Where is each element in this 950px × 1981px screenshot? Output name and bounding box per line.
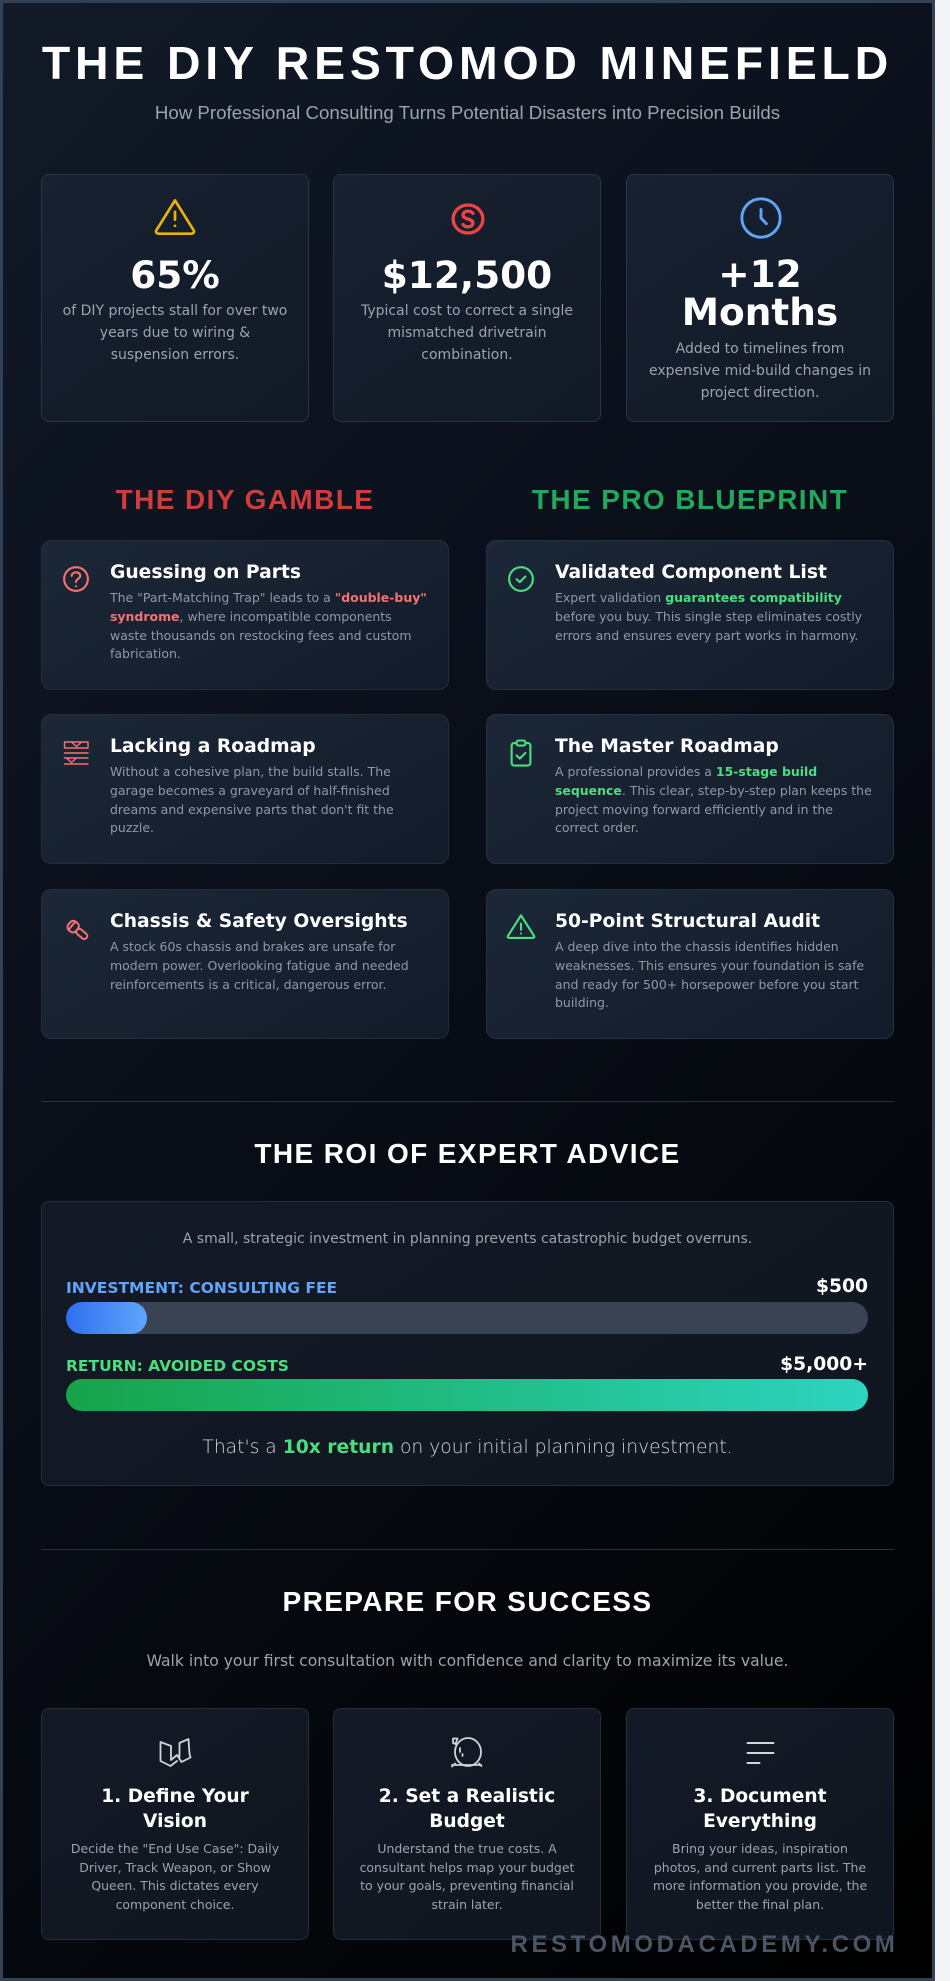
stat description: Added to timelines from [676, 341, 844, 357]
stat number: $12,500 [382, 253, 552, 297]
return label: RETURN: AVOIDED COSTS [66, 1357, 289, 1375]
stat description [360, 303, 573, 363]
feature text: weaknesses. This ensures your foundation is safe [555, 958, 864, 973]
feature text: garage becomes a graveyard of half-finished [110, 783, 390, 798]
feature text: sequence. This clear, step-by-step plan keeps the [555, 783, 872, 798]
step title: 3. Document [693, 1786, 827, 1807]
panel: guessing on parts [41, 540, 449, 690]
stat number: Months [682, 290, 838, 334]
step text: Understand the true costs. A [377, 1841, 557, 1856]
panel: lacking a roadmap [41, 714, 449, 864]
feature text: correct order. [555, 820, 639, 835]
step text: consultant helps map your budget [360, 1860, 574, 1875]
icon: bolt [66, 920, 88, 940]
stat number [682, 252, 838, 334]
feature text: A stock 60s chassis and brakes are unsafe for [110, 939, 395, 954]
step text: Queen. This dictates every [91, 1878, 259, 1893]
feature text: reinforcements is a critical, dangerous error. [110, 976, 386, 992]
panel: define your vision [41, 1708, 309, 1940]
feature text: and ready for 500+ horsepower before you start [555, 976, 858, 992]
heading: prepare for success: PREPARE FOR SUCCESS [283, 1586, 652, 1617]
step text: to your goals, preventing financial [360, 1878, 574, 1893]
ROI intro text: A small, strategic investment in planning prevents catastrophic budget overruns. [183, 1231, 752, 1247]
heading: ROI of expert advice: THE ROI OF EXPERT ADVICE [254, 1138, 681, 1169]
icon: warning triangle [154, 199, 196, 235]
feature text: errors and ensures every part works in harmony. [555, 628, 858, 642]
watermark: RESTOMODACADEMY.COM [511, 1931, 898, 1958]
feature text: A professional provides a 15-stage build [555, 764, 817, 779]
feature text [110, 764, 394, 835]
feature text [555, 939, 864, 1010]
step text: component choice. [116, 1897, 234, 1912]
step text [653, 1841, 867, 1912]
stat description: project direction. [701, 385, 819, 401]
feature text: fabrication. [110, 646, 181, 661]
icon: tangled list [64, 741, 89, 765]
panel: stat +12 months [626, 174, 894, 422]
prepare intro text: Walk into your first consultation with confidence and clarity to maximize its value. [147, 1652, 788, 1670]
step title: Budget [429, 1811, 505, 1832]
step text [360, 1841, 574, 1912]
panel: ROI comparison [41, 1201, 894, 1486]
stat description [63, 303, 287, 363]
step title: Everything [703, 1811, 817, 1832]
return bar [66, 1379, 868, 1411]
panel: the master roadmap [486, 714, 894, 864]
feature title: The Master Roadmap [555, 736, 779, 757]
feature text: dreams and expensive parts that don't fit the [110, 802, 394, 816]
step title: Vision [143, 1811, 207, 1832]
stat description: mismatched drivetrain [387, 325, 547, 341]
feature text [555, 590, 862, 642]
stat description [649, 341, 871, 401]
investment value: $500 [816, 1276, 868, 1297]
feature text: modern power. Overlooking fatigue and needed [110, 958, 409, 973]
subtitle: How Professional Consulting Turns Potential Disasters into Precision Builds [155, 102, 780, 123]
feature text: syndrome, where incompatible components [110, 609, 392, 624]
feature title: Chassis & Safety Oversights [110, 911, 408, 932]
feature title: 50-Point Structural Audit [555, 911, 820, 932]
feature text: Without a cohesive plan, the build stalls. The [110, 764, 391, 779]
feature text [110, 590, 427, 661]
stat number: 65% [130, 253, 220, 297]
feature text: Expert validation guarantees compatibility [555, 590, 842, 605]
icon: warning triangle [506, 914, 536, 939]
stat description: suspension errors. [111, 347, 239, 363]
step text [71, 1841, 279, 1912]
icon: clipboard check [510, 740, 532, 767]
investment bar [66, 1302, 868, 1334]
heading: the pro blueprint: THE PRO BLUEPRINT [532, 484, 848, 515]
panel: document everything [626, 1708, 894, 1940]
icon: open map [160, 1738, 192, 1767]
feature text: project moving forward efficiently and in the [555, 802, 833, 816]
stat number: +12 [718, 252, 802, 296]
stat description: combination. [421, 347, 513, 363]
feature text [555, 764, 872, 835]
ROI summary: That's a 10x return on your initial planning investment. [202, 1437, 733, 1458]
step text: better the final plan. [696, 1897, 824, 1912]
feature text: waste thousands on restocking fees and custom [110, 628, 411, 642]
icon: check circle [508, 566, 534, 592]
icon: dollar circle [452, 203, 484, 235]
stat description: expensive mid-build changes in [649, 363, 871, 379]
feature text: puzzle. [110, 820, 154, 835]
feature text: before you buy. This single step eliminates costly [555, 609, 862, 624]
step title [693, 1786, 827, 1832]
feature text: building. [555, 995, 609, 1010]
feature text: The "Part-Matching Trap" leads to a "double-buy" [110, 590, 427, 605]
panel: validated component list [486, 540, 894, 690]
panel: 50-point structural audit [486, 889, 894, 1039]
icon: text lines [746, 1742, 774, 1764]
step title [379, 1786, 555, 1832]
feature text: A deep dive into the chassis identifies hidden [555, 939, 839, 954]
investment label: INVESTMENT: CONSULTING FEE [66, 1279, 337, 1297]
step text: Decide the "End Use Case": Daily [71, 1841, 279, 1856]
step title: 1. Define Your [101, 1786, 249, 1807]
step text: more information you provide, the [653, 1878, 867, 1893]
feature text [110, 939, 409, 992]
panel: stat 65% [41, 174, 309, 422]
feature title: Guessing on Parts [110, 562, 301, 583]
feature title: Validated Component List [555, 562, 827, 583]
icon: clock [740, 197, 782, 239]
panel: stat $12,500 [333, 174, 601, 422]
panel: chassis and safety oversights [41, 889, 449, 1039]
step text: strain later. [431, 1897, 503, 1912]
feature title: Lacking a Roadmap [110, 736, 316, 757]
icon: budget coin [451, 1737, 482, 1768]
title: THE DIY RESTOMOD MINEFIELD [42, 37, 893, 89]
step text: Bring your ideas, inspiration [672, 1841, 848, 1856]
step title [101, 1786, 249, 1832]
stat description: Typical cost to correct a single [361, 303, 573, 319]
stat description: years due to wiring & [100, 325, 250, 341]
step text: photos, and current parts list. The [654, 1860, 866, 1875]
return value: $5,000+ [780, 1354, 868, 1375]
panel: set a realistic budget [333, 1708, 601, 1940]
step text: Driver, Track Weapon, or Show [79, 1860, 271, 1875]
stat description: of DIY projects stall for over two [63, 303, 287, 319]
step title: 2. Set a Realistic [379, 1786, 555, 1807]
icon: question circle [63, 566, 89, 592]
heading: the DIY gamble: THE DIY GAMBLE [116, 484, 374, 515]
